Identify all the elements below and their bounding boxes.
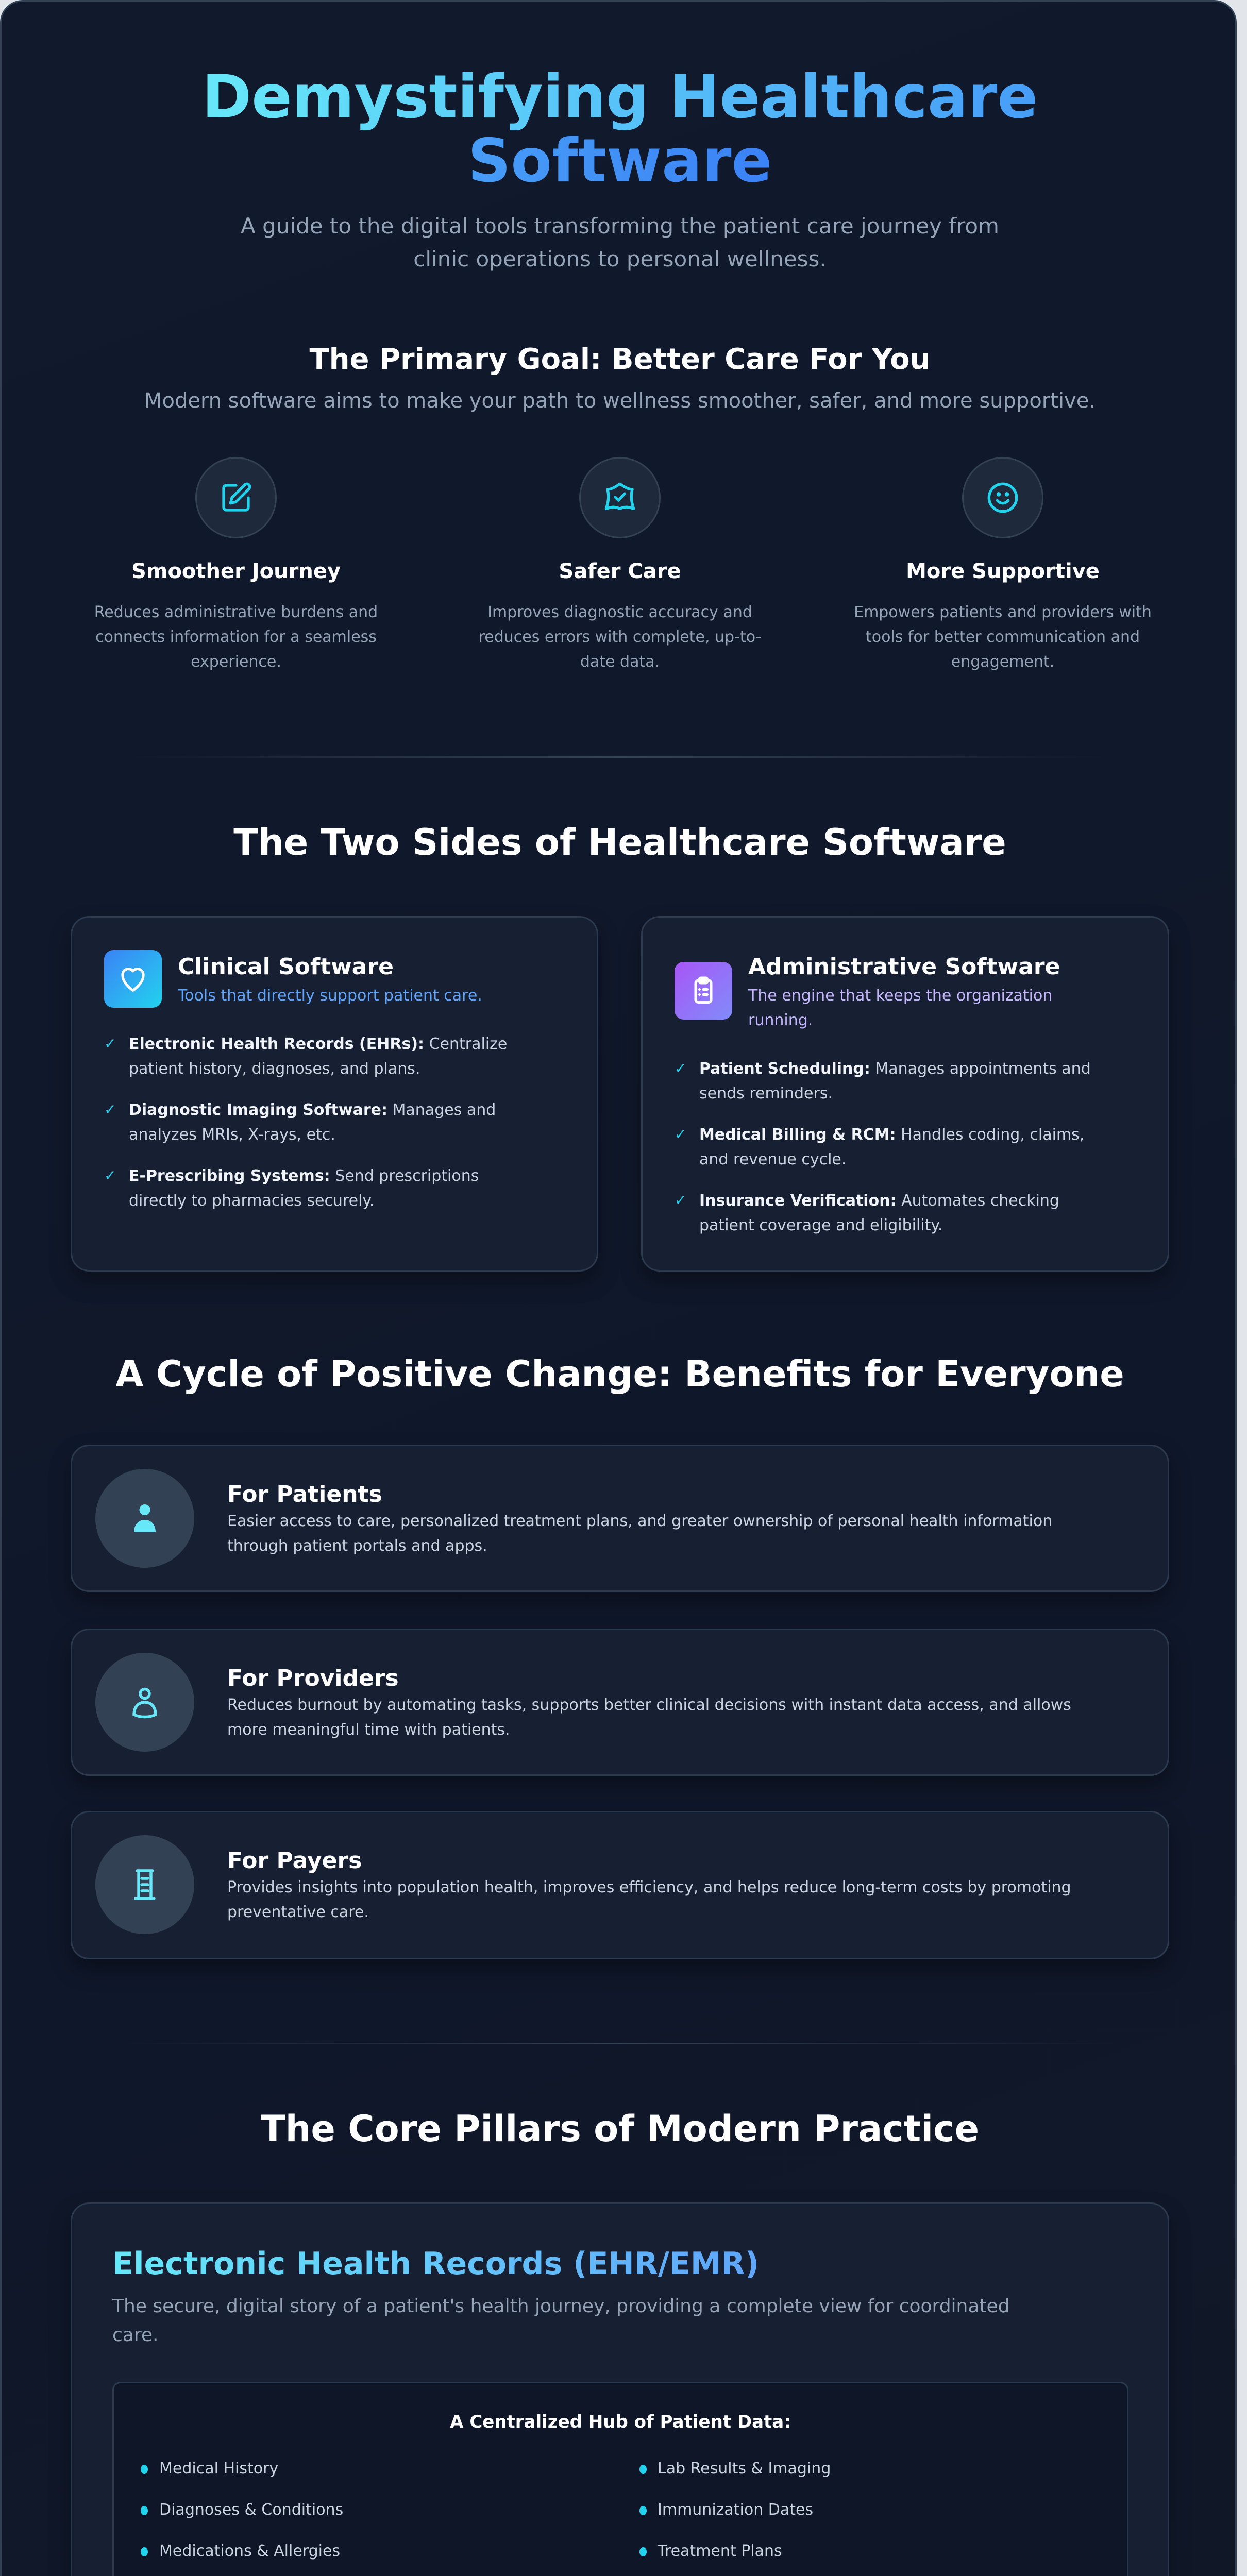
EHR description: care. [112, 2325, 158, 2346]
admin subtitle: The engine that keeps the organization [748, 987, 1052, 1005]
text: safer care: Safer Care [559, 560, 681, 583]
text: smoother journey [94, 560, 378, 671]
text: safer care: Improves diagnostic accuracy and [487, 603, 752, 621]
payers text: For Payers [227, 1848, 362, 1874]
providers text: For Providers [227, 1665, 399, 1691]
clinical list: ✓ [104, 1101, 116, 1118]
panel: for payers [71, 1811, 1169, 1959]
hub list: Immunization Dates [658, 2501, 813, 2519]
icon: clipboard [675, 962, 732, 1020]
admin subtitle [748, 987, 1052, 1029]
panel: for providers [71, 1629, 1169, 1776]
hub list: Medical History [159, 2460, 278, 2478]
payers text: Provides insights into population health, improves efficiency, and helps reduce long-term costs by promoting [227, 1878, 1071, 1896]
providers text [227, 1665, 1071, 1739]
text: more supportive: engagement. [951, 653, 1054, 671]
clinical list: E-Prescribing Systems: Send prescriptions [129, 1167, 479, 1185]
title: Software [468, 126, 772, 196]
heading: cycle of positive change: A Cycle of Positive Change: Benefits for Everyone [115, 1353, 1124, 1395]
patients text: For Patients [227, 1481, 382, 1507]
EHR description: The secure, digital story of a patient's health journey, providing a complete view for coordinated [112, 2296, 1010, 2317]
admin list: ✓ [675, 1126, 686, 1143]
panel: EHR/EMR [71, 2202, 1169, 2576]
admin list: Patient Scheduling: Manages appointments and [699, 1060, 1091, 1078]
icon: shield check [579, 457, 661, 538]
title: Demystifying Healthcare [202, 62, 1038, 132]
clinical list [104, 1035, 507, 1210]
subtitle [241, 213, 999, 272]
text: safer care: reduces errors with complete, up-to- [479, 628, 761, 646]
providers text: more meaningful time with patients. [227, 1721, 510, 1739]
clinical list: ✓ [104, 1167, 116, 1184]
panel: clinical software [71, 916, 598, 1272]
text: safer care: date data. [580, 653, 660, 671]
clinical list: Diagnostic Imaging Software: Manages and [129, 1101, 496, 1119]
EHR title: Electronic Health Records (EHR/EMR) [112, 2246, 759, 2282]
text: smoother journey: connects information for a seamless [95, 628, 377, 646]
text: smoother journey: Reduces administrative burdens and [94, 603, 378, 621]
text: more supportive: More Supportive [906, 560, 1100, 583]
text: safer care [479, 560, 761, 671]
admin list: patient coverage and eligibility. [699, 1216, 942, 1234]
panel: for patients [71, 1445, 1169, 1592]
icon: person filled [95, 1469, 194, 1568]
admin list [675, 1060, 1091, 1234]
admin list: ✓ [675, 1192, 686, 1209]
admin list: and revenue cycle. [699, 1150, 846, 1168]
patients text: through patient portals and apps. [227, 1537, 487, 1555]
title [202, 62, 1038, 196]
icon: person outline [95, 1653, 194, 1752]
hub list: Treatment Plans [658, 2542, 782, 2560]
icon: heart [104, 950, 162, 1008]
text: more supportive [854, 560, 1152, 671]
subtitle: clinic operations to personal wellness. [413, 246, 827, 272]
subtitle: A guide to the digital tools transforming the patient care journey from [241, 213, 999, 239]
providers text: Reduces burnout by automating tasks, supports better clinical decisions with instant data access, and allows [227, 1696, 1071, 1714]
text: more supportive: Empowers patients and providers with [854, 603, 1152, 621]
icon: scroll [95, 1835, 194, 1934]
admin list: Insurance Verification: Automates checking [699, 1192, 1059, 1210]
goal: safer care [479, 457, 761, 671]
admin list: sends reminders. [699, 1084, 833, 1103]
panel: administrative software [641, 916, 1169, 1272]
clinical list: patient history, diagnoses, and plans. [129, 1060, 420, 1078]
clinical list: ✓ [104, 1035, 116, 1052]
heading: core pillars: The Core Pillars of Modern Practice [261, 2108, 979, 2150]
goal: smoother journey [94, 457, 378, 671]
payers text: preventative care. [227, 1903, 369, 1921]
clinical subtitle: Tools that directly support patient care. [178, 987, 482, 1005]
clinical list: analyzes MRIs, X-rays, etc. [129, 1126, 335, 1144]
heading: primary goal: The Primary Goal: Better Care For You [309, 343, 931, 376]
icon: smile [962, 457, 1043, 538]
goal: more supportive [854, 457, 1152, 671]
admin list: Medical Billing & RCM: Handles coding, claims, [699, 1126, 1084, 1144]
heading: two sides: The Two Sides of Healthcare Software [233, 821, 1006, 863]
hub list [141, 2460, 831, 2560]
hub list: Diagnoses & Conditions [159, 2501, 343, 2519]
icon: pencil [195, 457, 277, 538]
patients text: Easier access to care, personalized treatment plans, and greater ownership of personal health information [227, 1512, 1052, 1530]
admin subtitle: running. [748, 1011, 813, 1029]
clinical list: Electronic Health Records (EHRs): Centralize [129, 1035, 507, 1053]
hub list: Lab Results & Imaging [658, 2460, 831, 2478]
hub heading: A Centralized Hub of Patient Data: [450, 2412, 791, 2432]
text: smoother journey: Smoother Journey [131, 560, 341, 583]
hub list: Medications & Allergies [159, 2542, 340, 2560]
text: more supportive: tools for better communication and [866, 628, 1140, 646]
data hub box [112, 2382, 1128, 2576]
admin title: Administrative Software [748, 954, 1060, 980]
payers text [227, 1848, 1071, 1921]
primary goal subtext: Modern software aims to make your path to wellness smoother, safer, and more supportive. [144, 389, 1096, 413]
admin list: ✓ [675, 1060, 686, 1077]
clinical title: Clinical Software [178, 954, 394, 980]
EHR description [112, 2296, 1010, 2346]
clinical list: directly to pharmacies securely. [129, 1192, 374, 1210]
text: smoother journey: experience. [191, 653, 281, 671]
patients text [227, 1481, 1052, 1555]
